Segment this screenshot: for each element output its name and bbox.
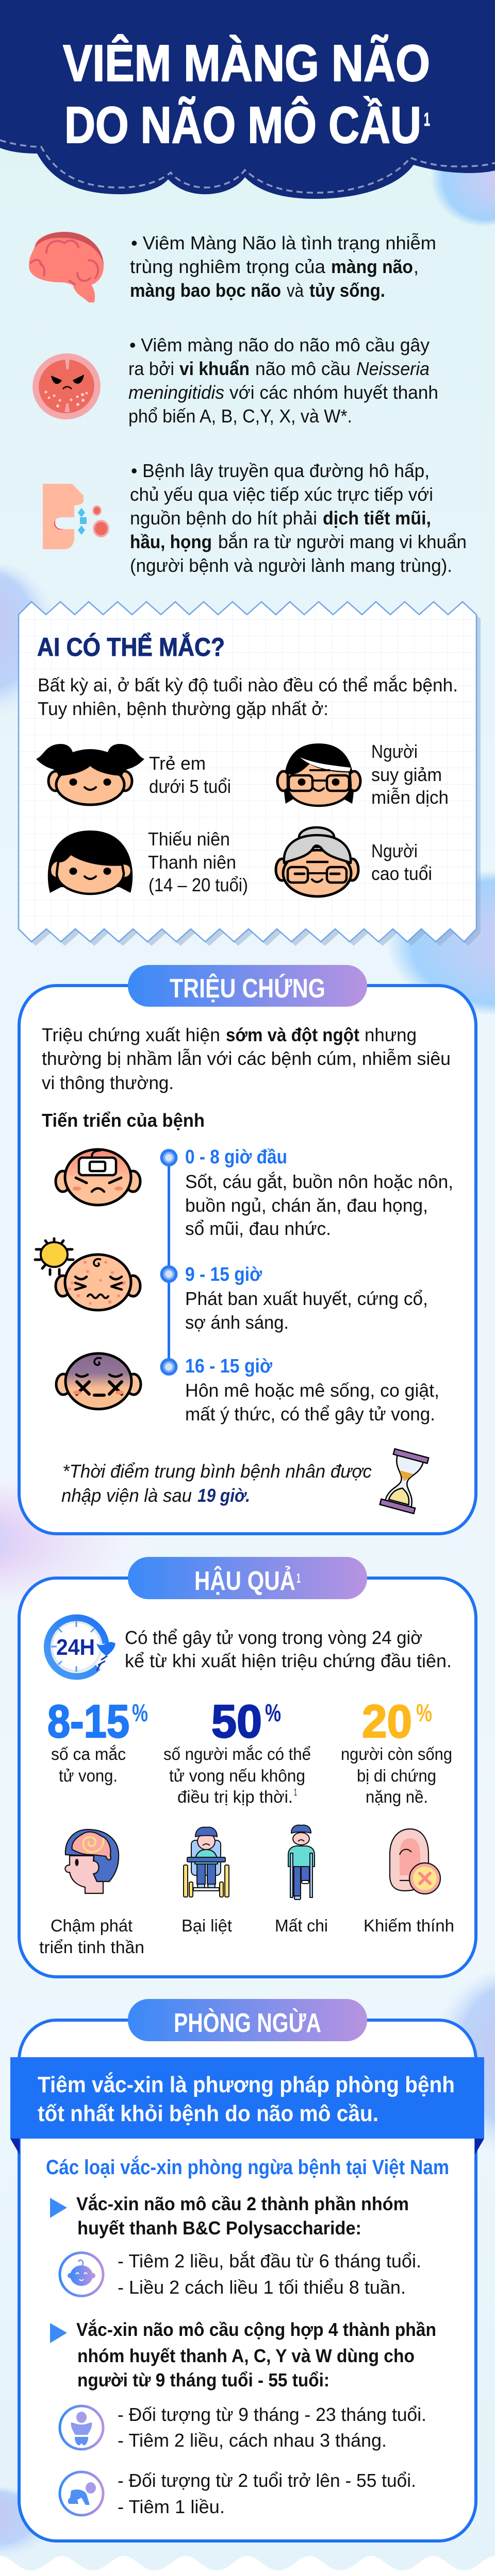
icon: baby face	[60, 2252, 103, 2296]
text: vaccine 2 schedule A	[118, 2404, 426, 2451]
timeline stage 3	[56, 1353, 439, 1425]
label: elderly: cao tuổi	[371, 863, 432, 884]
text: definition: • Viêm Màng Não là tình trạng nhiễm	[131, 232, 436, 253]
text: fatal within 24h: kể từ khi xuất hiện triệu chứng đầu tiên.	[125, 1650, 452, 1671]
stat: 50%: tử vong nếu không	[169, 1766, 305, 1785]
timeline stage 2	[35, 1239, 428, 1333]
text: cause: Neisseria	[356, 358, 430, 379]
stat: 50%	[163, 1696, 311, 1806]
group: children	[36, 744, 231, 805]
icon: mouth spreading droplets	[43, 484, 109, 549]
text: stage 2: Phát ban xuất huyết, cứng cổ,	[185, 1288, 428, 1309]
icon: teen face	[48, 831, 133, 894]
label: children: Trẻ em	[149, 753, 206, 774]
label: hearing loss: Khiếm thính	[364, 1916, 454, 1935]
label: paralysis: Bại liệt	[182, 1916, 232, 1935]
intro item: transmission	[43, 460, 467, 576]
text: symptoms intro: sớm và đột ngột	[226, 1024, 359, 1045]
icon: head with spiral	[65, 1829, 119, 1893]
label: elderly: Người	[371, 840, 418, 861]
text: vaccine 1 schedule: - Liều 2 cách liều 1 tối thiểu 8 tuần.	[118, 2277, 406, 2298]
label: immunocompromised: Người	[371, 741, 418, 762]
text: stage 1: buồn ngủ, chán ăn, đau họng,	[185, 1195, 428, 1216]
stat: 8-15%	[47, 1696, 148, 1785]
text: cause: ra bởi	[128, 358, 174, 379]
timeline dot	[160, 1149, 177, 1166]
stat: 50%: 1	[294, 1787, 297, 1798]
text: stage 1: 0 - 8 giờ đầu	[185, 1146, 287, 1168]
stat: 20%	[341, 1696, 452, 1806]
text: stage 2: 9 - 15 giờ	[185, 1264, 262, 1285]
text: vaccine 1 name	[76, 2193, 409, 2239]
text: symptoms intro: thường bị nhầm lẫn với các bệnh cúm, nhiễm siêu	[42, 1048, 451, 1069]
text: cause: não mô cầu	[255, 358, 351, 379]
text: definition: trùng nghiêm trọng của	[130, 256, 326, 277]
white wave section	[0, 2556, 495, 2576]
icon: person on crutches	[288, 1825, 315, 1900]
text: symptoms intro	[42, 1024, 451, 1093]
text: vaccine 2 schedule A: - Đối tượng từ 9 tháng - 23 tháng tuổi.	[118, 2404, 426, 2425]
sequela: mental retardation	[39, 1829, 144, 1957]
label: immunocompromised	[371, 741, 449, 808]
text: vaccine 1 schedule: - Tiêm 2 liều, bắt đầu từ 6 tháng tuổi.	[118, 2250, 421, 2272]
text: definition: tủy sống.	[309, 280, 385, 301]
text: vaccine 1 name: huyết thanh B&C Polysaccharide:	[77, 2217, 361, 2239]
text: cause: với các nhóm huyết thanh	[229, 382, 438, 403]
stat: 8-15%: 8-15	[47, 1696, 129, 1748]
stat: 20%: bị di chứng	[357, 1766, 436, 1785]
text: transmission: • Bệnh lây truyền qua đường hô hấp,	[131, 460, 430, 481]
text: vaccine 1 schedule	[118, 2250, 421, 2298]
text: definition	[130, 232, 436, 301]
icon: rash face with sun	[35, 1239, 140, 1310]
text: vaccine 2 name	[76, 2318, 436, 2391]
text: transmission: hầu, họng	[130, 531, 212, 552]
panel: prevention	[10, 1999, 484, 2541]
text: definition: ,	[414, 256, 419, 277]
heading pill: prevention: PHÒNG NGỪA	[174, 2008, 321, 2038]
timeline line	[168, 1158, 170, 1367]
subheading: vaccine types: Các loại vắc-xin phòng ngừa bệnh tại Việt Nam	[46, 2155, 449, 2179]
text: symptoms intro: nhưng	[365, 1024, 417, 1045]
banner: vaccination message	[10, 2057, 484, 2155]
stat: 50%: 50	[211, 1696, 262, 1748]
icon: brain	[29, 232, 104, 302]
timeline dot	[160, 1265, 177, 1283]
header banner	[0, 0, 495, 199]
icon: arrow bullet	[50, 2198, 67, 2218]
text: stage 2	[185, 1264, 428, 1333]
sequela: paralysis	[182, 1827, 232, 1935]
heading pill: consequences: HẬU QUẢ	[194, 1566, 295, 1596]
icon: 24 hours clock	[47, 1618, 116, 1676]
label: elderly	[371, 840, 432, 884]
icon: angry throat	[26, 347, 107, 426]
label: children	[149, 753, 231, 797]
panel: who can get it	[19, 602, 481, 946]
stat: 20%: 20	[362, 1696, 412, 1748]
text: vaccine 2 schedule A: - Tiêm 2 liều, cách nhau 3 tháng.	[118, 2430, 387, 2451]
stat: 8-15%: %	[132, 1700, 148, 1727]
text: cause	[128, 334, 438, 427]
icon: 24 hours clock: 24H	[56, 1635, 95, 1660]
heading pill: consequences	[128, 1557, 367, 1599]
text: vaccine 1 name: Vắc-xin não mô cầu 2 thành phần nhóm	[76, 2193, 409, 2214]
text: transmission: nguồn bệnh do hít phải	[130, 507, 317, 529]
label: children: dưới 5 tuổi	[149, 776, 231, 797]
title: 1	[424, 109, 430, 130]
text: who intro	[38, 674, 458, 719]
text: vaccine 2 name: người từ 9 tháng tuổi - 55 tuổi:	[77, 2369, 329, 2391]
timeline stage 1	[56, 1146, 453, 1239]
title: DO NÃO MÔ CẦU	[64, 96, 421, 154]
group: teens	[48, 828, 248, 895]
label: limb loss: Mất chi	[275, 1916, 328, 1935]
text: stage 3: Hôn mê hoặc mê sống, co giật,	[185, 1380, 439, 1401]
stat: 50%: %	[265, 1700, 281, 1727]
stat: 20%: người còn sống	[341, 1744, 452, 1764]
note: hospital admission time: *Thời điểm trung bình bệnh nhân được	[62, 1461, 372, 1482]
vaccine 2	[50, 2318, 436, 2517]
text: cause: meningitidis	[128, 382, 224, 403]
text: transmission: dịch tiết mũi,	[323, 507, 431, 529]
text: stage 3: mất ý thức, có thể gây tử vong.	[185, 1403, 435, 1425]
group: elderly	[276, 827, 432, 896]
stat: 8-15%: tử vong.	[59, 1766, 118, 1785]
vaccine 1	[50, 2193, 421, 2298]
note: hospital admission time: nhập viện là sau	[61, 1485, 192, 1506]
text: transmission: bắn ra từ người mang vi khuẩn	[218, 531, 467, 552]
text: fatal within 24h: Có thể gây tử vong trong vòng 24 giờ	[125, 1627, 422, 1648]
text: definition: và	[287, 280, 304, 301]
icon: feverish face	[56, 1149, 140, 1205]
subheading: progression: Tiến triển của bệnh	[42, 1110, 205, 1131]
text: symptoms intro: vi thông thường.	[42, 1072, 174, 1093]
icon: standing baby	[60, 2406, 103, 2449]
heading pill: consequences: 1	[296, 1570, 301, 1586]
text: cause: • Viêm màng não do não mô cầu gây	[129, 334, 430, 355]
title: VIÊM MÀNG NÃO	[63, 35, 430, 92]
stat: 50%: số người mắc có thể	[163, 1744, 311, 1764]
label: teens: Thiếu niên	[148, 828, 230, 850]
text: stage 1: Sốt, cáu gắt, buồn nôn hoặc nôn,	[185, 1171, 453, 1192]
banner: vaccination message: Tiêm vắc-xin là phương pháp phòng bệnh	[38, 2072, 455, 2097]
icon: child face	[36, 744, 144, 805]
text: stage 1	[185, 1146, 453, 1239]
text: definition: màng bao bọc não	[130, 280, 281, 301]
label: mental retardation: Chậm phát	[51, 1916, 133, 1935]
label: mental retardation	[39, 1916, 144, 1957]
sequela: limb loss	[275, 1825, 328, 1935]
text: definition: màng não	[331, 256, 413, 277]
text: cause: phổ biến A, B, C,Y, X, và W*.	[128, 405, 352, 427]
icon: unconscious face	[56, 1353, 141, 1409]
text: vaccine 2 schedule B: - Tiêm 1 liều.	[118, 2496, 225, 2517]
icon: arrow bullet	[50, 2323, 67, 2343]
heading pill: symptoms: TRIỆU CHỨNG	[170, 973, 325, 1004]
stat: 20%: %	[416, 1700, 432, 1727]
timeline dot	[160, 1358, 177, 1376]
label: teens: Thanh niên	[148, 852, 236, 873]
text: stage 1: sổ mũi, đau nhức.	[185, 1218, 331, 1239]
intro item: brain	[29, 232, 436, 302]
icon: elderly face	[276, 827, 358, 896]
icon: hourglass	[380, 1449, 428, 1514]
text: stage 3	[185, 1355, 439, 1425]
panel: consequences	[19, 1557, 476, 1977]
stat: 50%: điều trị kịp thời.	[177, 1787, 293, 1806]
group: immunocompromised	[277, 741, 449, 808]
text: transmission: chủ yếu qua việc tiếp xúc trực tiếp với	[130, 484, 433, 505]
panel: symptoms	[19, 965, 476, 1534]
title	[63, 35, 430, 154]
text: who intro: Tuy nhiên, bệnh thường gặp nhất ở:	[38, 698, 328, 719]
text: vaccine 2 schedule B	[118, 2470, 416, 2517]
label: immunocompromised: suy giảm	[371, 764, 442, 785]
stat: 8-15%: số ca mắc	[51, 1744, 126, 1764]
label: mental retardation: triển tinh thần	[39, 1938, 144, 1957]
icon: face with glasses	[277, 743, 360, 806]
text: cause: vi khuẩn	[179, 358, 250, 379]
text: vaccine 2 schedule B: - Đối tượng từ 2 tuổi trở lên - 55 tuổi.	[118, 2470, 416, 2491]
sequela: hearing loss	[364, 1829, 454, 1935]
label: teens: (14 – 20 tuổi)	[148, 874, 248, 895]
text: transmission: (người bệnh và người lành mang trùng).	[130, 555, 452, 576]
heading pill: prevention	[128, 1999, 367, 2041]
note: hospital admission time: 19 giờ.	[197, 1485, 250, 1506]
text: who intro: Bất kỳ ai, ở bất kỳ độ tuổi nào đều có thể mắc bệnh.	[38, 674, 458, 696]
text: symptoms intro: Triệu chứng xuất hiện	[42, 1024, 220, 1045]
icon: crawling baby	[60, 2472, 103, 2515]
icon: ear with cross	[390, 1829, 440, 1894]
text: vaccine 2 name: nhóm huyết thanh A, C, Y và W dùng cho	[77, 2345, 415, 2366]
text: vaccine 2 name: Vắc-xin não mô cầu cộng hợp 4 thành phần	[76, 2318, 436, 2340]
text: stage 2: sợ ánh sáng.	[185, 1312, 289, 1333]
label: immunocompromised: miễn dịch	[371, 787, 449, 808]
intro item: bacteria	[26, 334, 438, 427]
text: fatal within 24h	[125, 1627, 452, 1671]
stat: 20%: nặng nề.	[366, 1787, 428, 1806]
text: stage 3: 16 - 15 giờ	[185, 1355, 273, 1377]
banner: vaccination message: tốt nhất khỏi bệnh do não mô cầu.	[38, 2101, 378, 2126]
label: teens	[148, 828, 248, 895]
note: hospital admission time	[61, 1461, 372, 1506]
heading: who: AI CÓ THỂ MẮC?	[37, 633, 225, 662]
heading pill: symptoms	[128, 965, 367, 1007]
icon: person in wheelchair	[184, 1827, 229, 1897]
text: transmission	[130, 460, 467, 576]
